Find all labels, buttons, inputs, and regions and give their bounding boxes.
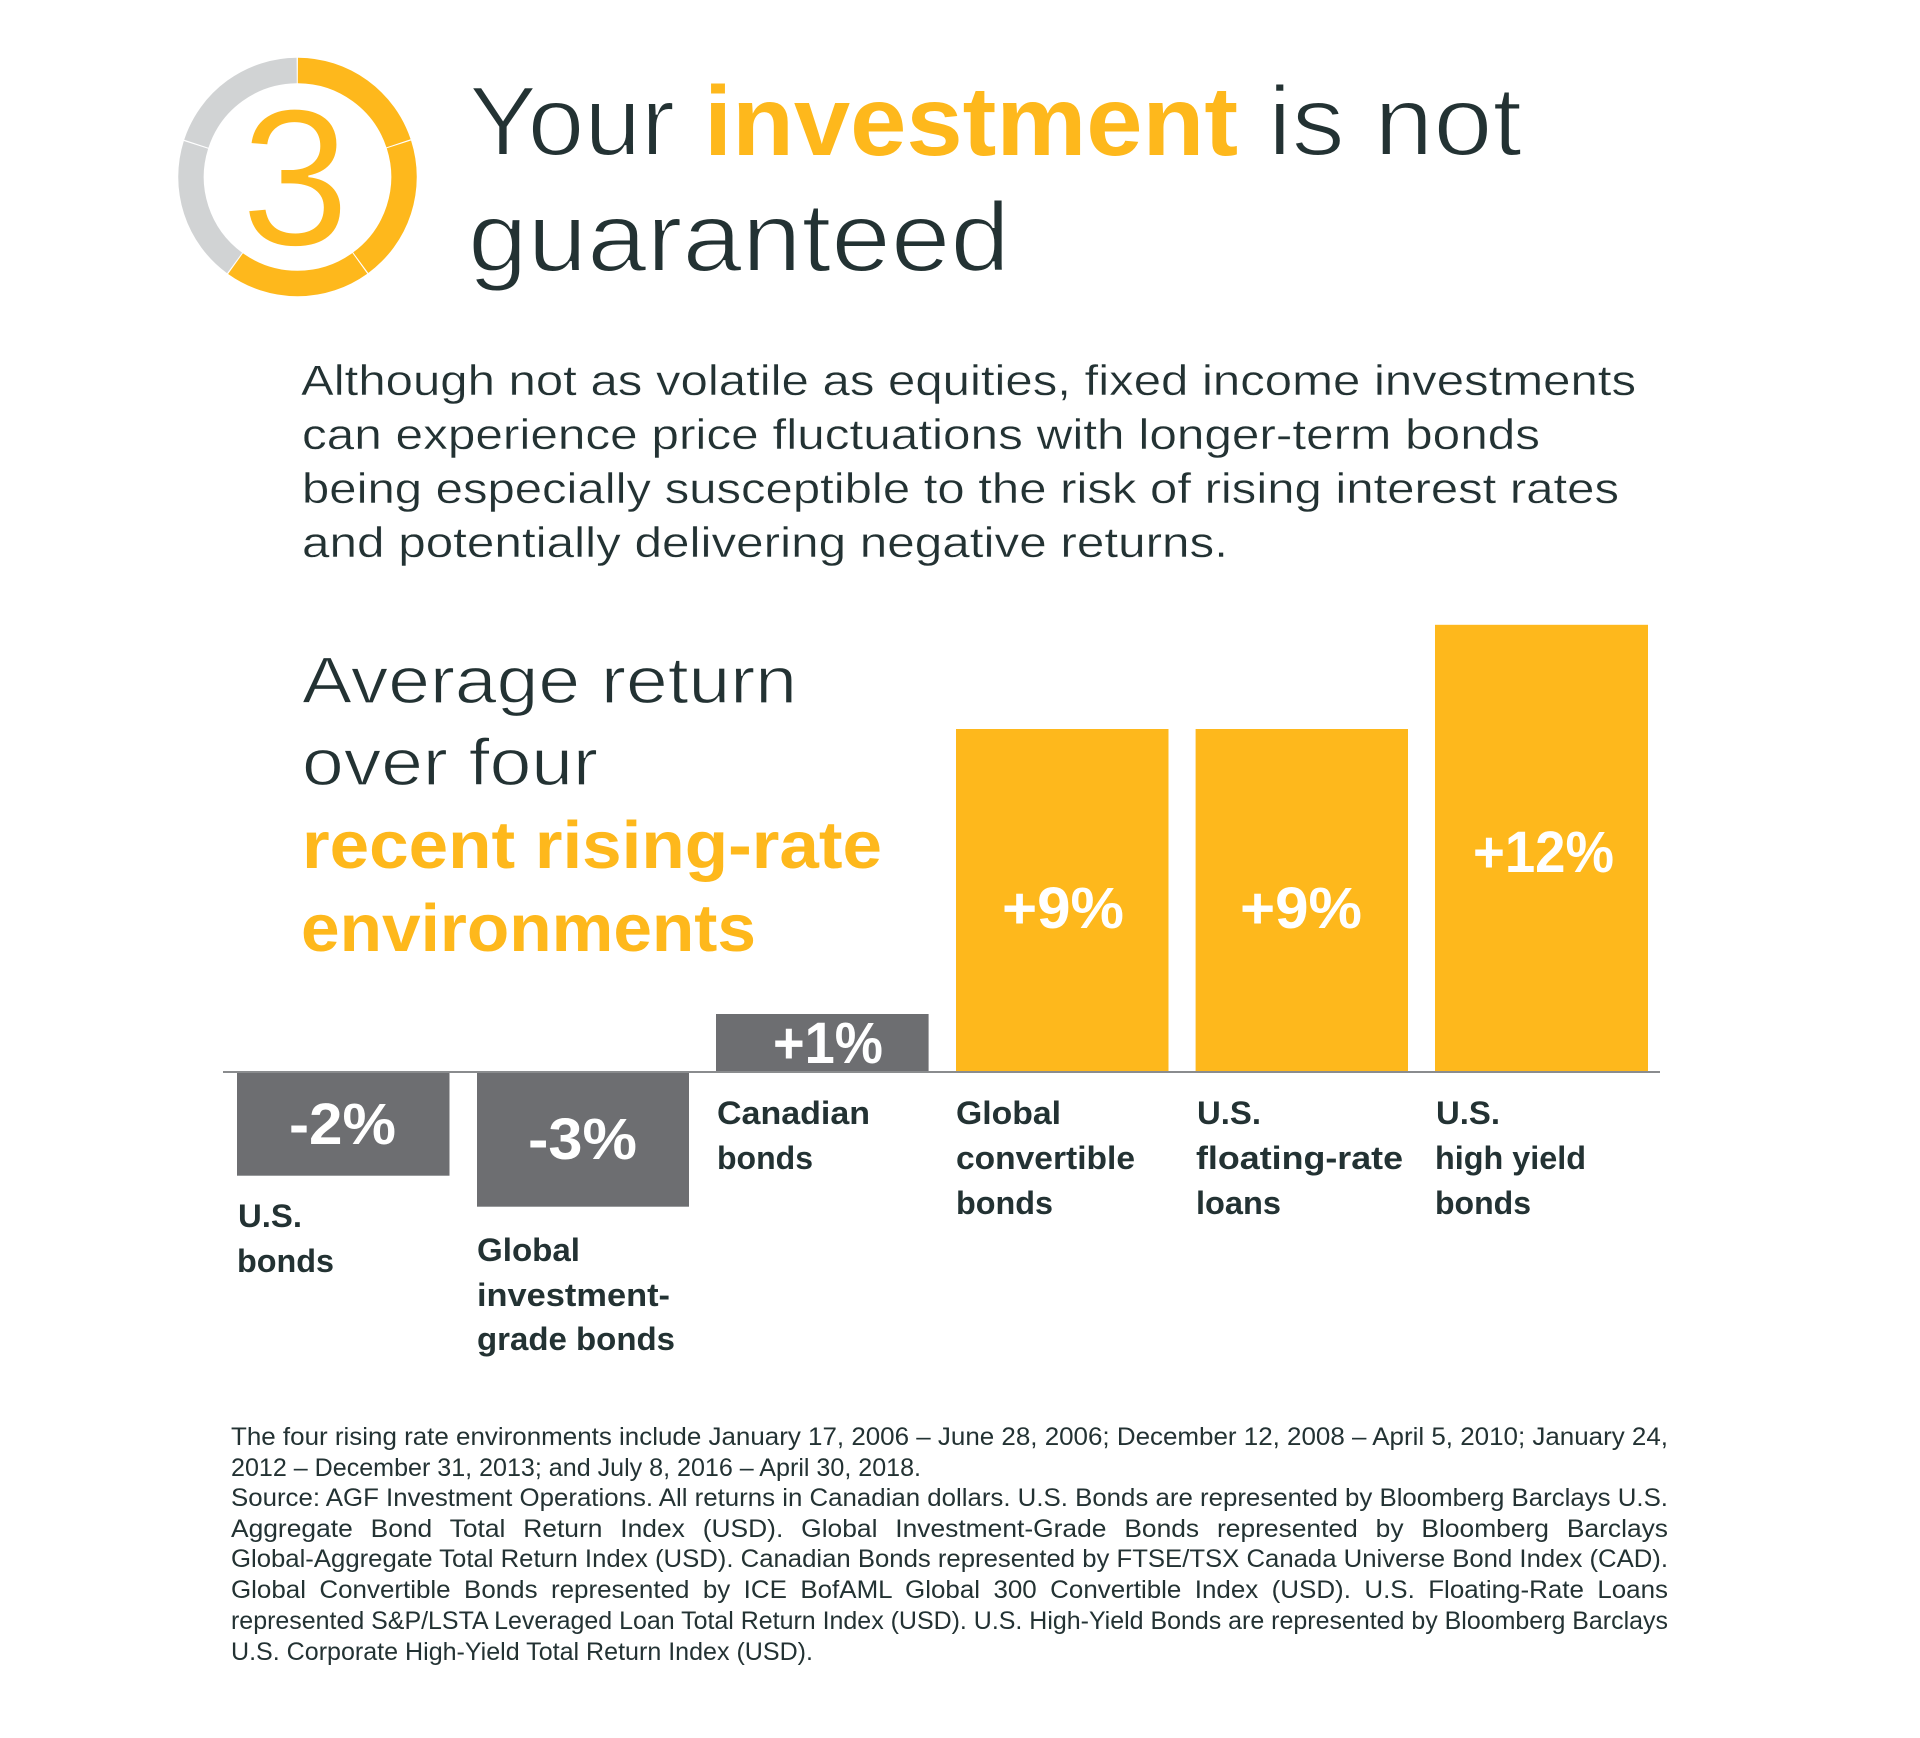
bar: U.S. floating-rate loans: +9% xyxy=(1240,876,1362,941)
title: investment xyxy=(704,66,1238,176)
bar: Canadian bonds: bonds xyxy=(717,1140,813,1176)
footnote: Global Convertible Bonds represented by ICE BofAML Global 300 Convertible Index (USD). U.S. Floating-Rate Loans xyxy=(231,1576,1668,1604)
bar: Global investment-grade bonds: -3% xyxy=(528,1107,637,1172)
bar: U.S. high yield bonds: high yield xyxy=(1435,1140,1586,1176)
bar: U.S. floating-rate loans: floating-rate xyxy=(1196,1140,1403,1176)
intro paragraph: Although not as volatile as equities, fixed income investments xyxy=(301,357,1636,405)
bar: U.S. floating-rate loans xyxy=(1196,729,1408,1221)
chart heading: Average return xyxy=(302,643,797,717)
bar: Global convertible bonds xyxy=(956,729,1168,1221)
bar: Global investment-grade bonds: grade bonds xyxy=(477,1321,675,1357)
bar: Global convertible bonds: convertible xyxy=(956,1140,1135,1176)
footnote: Global-Aggregate Total Return Index (USD). Canadian Bonds represented by FTSE/TSX Canada Universe Bond Index (CAD). xyxy=(231,1545,1668,1573)
bar: Global investment-grade bonds: investment- xyxy=(477,1277,670,1313)
icon: progress ring with number 3 xyxy=(149,28,446,326)
icon: progress ring with number 3: 3 xyxy=(241,69,349,287)
bar: U.S. bonds xyxy=(237,1073,450,1279)
footnote: represented S&P/LSTA Leveraged Loan Total Return Index (USD). U.S. High-Yield Bonds are represented by Bloomberg Barclays xyxy=(231,1607,1668,1635)
chart heading: over four xyxy=(302,725,598,799)
chart heading xyxy=(301,643,882,966)
footnote: Aggregate Bond Total Return Index (USD). Global Investment-Grade Bonds represented by Bloomberg Barclays xyxy=(231,1515,1668,1543)
chart heading: recent rising-rate xyxy=(302,808,882,883)
title: is not xyxy=(1268,66,1522,176)
footnote: Source: AGF Investment Operations. All returns in Canadian dollars. U.S. Bonds are represented by Bloomberg Barclays U.S. xyxy=(231,1484,1668,1512)
footnote: The four rising rate environments include January 17, 2006 – June 28, 2006; December 12, 2008 – April 5, 2010; January 24, xyxy=(231,1423,1668,1451)
bar: U.S. bonds: -2% xyxy=(289,1092,396,1157)
title: Your xyxy=(469,66,675,176)
bar: Global convertible bonds: +9% xyxy=(1002,876,1124,941)
title: guaranteed xyxy=(468,182,1010,292)
bar: U.S. bonds: bonds xyxy=(237,1243,334,1279)
footnote: 2012 – December 31, 2013; and July 8, 2016 – April 30, 2018. xyxy=(231,1454,921,1482)
bar: Global investment-grade bonds: Global xyxy=(477,1232,580,1268)
bar: Global investment-grade bonds xyxy=(477,1073,689,1357)
bar: Canadian bonds: Canadian xyxy=(717,1095,870,1131)
bar: U.S. floating-rate loans: U.S. xyxy=(1197,1095,1261,1131)
bar: U.S. high yield bonds xyxy=(1435,625,1648,1221)
footnote xyxy=(231,1423,1668,1666)
bar: Canadian bonds: +1% xyxy=(773,1011,883,1076)
bar: U.S. high yield bonds: U.S. xyxy=(1436,1095,1500,1131)
bar: U.S. high yield bonds: +12% xyxy=(1473,820,1614,885)
chart heading: environments xyxy=(301,891,756,966)
bar: U.S. floating-rate loans: loans xyxy=(1196,1185,1281,1221)
chart axis xyxy=(223,1071,1660,1073)
intro paragraph: and potentially delivering negative returns. xyxy=(302,519,1228,567)
bar chart xyxy=(223,625,1660,1357)
bar: Canadian bonds xyxy=(716,1011,929,1176)
bar: U.S. bonds: U.S. xyxy=(238,1198,302,1234)
intro paragraph: being especially susceptible to the risk of rising interest rates xyxy=(302,465,1619,513)
bar: U.S. high yield bonds: bonds xyxy=(1435,1185,1531,1221)
bar: Global convertible bonds: Global xyxy=(956,1095,1061,1131)
footnote: U.S. Corporate High-Yield Total Return Index (USD). xyxy=(231,1638,813,1666)
title xyxy=(468,66,1522,292)
intro paragraph xyxy=(301,357,1636,567)
intro paragraph: can experience price fluctuations with longer-term bonds xyxy=(302,411,1540,459)
bar: Global convertible bonds: bonds xyxy=(956,1185,1053,1221)
